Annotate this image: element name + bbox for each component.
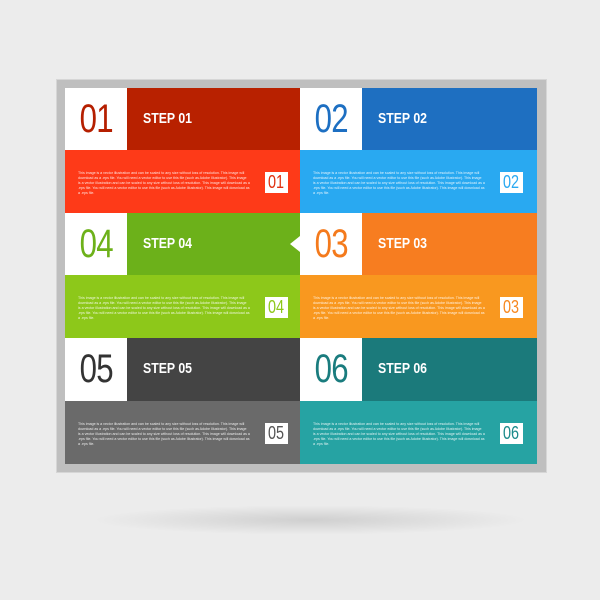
- text block 05: [65, 401, 300, 464]
- arrow: 02 to 03: [503, 212, 521, 222]
- number 03: 03: [314, 222, 348, 266]
- number 06: [300, 338, 362, 401]
- text block 05: This image is a vector illustration and can be scaled to any size without loss of resolution. This image will download as a .eps file. You will need a vector editor to use this file (such as Adobe Illustrator). This image is a vector illustration and can be scaled to any size without loss of resolution. This image will download as a .eps file. You will need a vector editor to use this file (such as Adobe Illustrator). This image will download as a .eps file.: [78, 422, 250, 446]
- heading step 02: [362, 88, 537, 150]
- panel: step 02: [300, 88, 537, 213]
- text block 06: This image is a vector illustration and can be scaled to any size without loss of resolution. This image will download as a .eps file. You will need a vector editor to use this file (such as Adobe Illustrator). This image is a vector illustration and can be scaled to any size without loss of resolution. This image will download as a .eps file. You will need a vector editor to use this file (such as Adobe Illustrator). This image will download as a .eps file.: [313, 422, 485, 446]
- heading step 02: STEP 02: [378, 110, 427, 127]
- text block 01: [65, 150, 300, 213]
- heading step 03: [362, 213, 537, 275]
- arrow: 04 to 05: [85, 337, 103, 347]
- number 02: 02: [314, 97, 348, 141]
- panel: step 04: [65, 213, 300, 338]
- text block 05: 05: [268, 423, 285, 443]
- number 04: 04: [79, 222, 113, 266]
- number 02: [300, 88, 362, 150]
- text block 06: [300, 401, 537, 464]
- heading step 01: STEP 01: [143, 110, 192, 127]
- text block 01: This image is a vector illustration and can be scaled to any size without loss of resolution. This image will download as a .eps file. You will need a vector editor to use this file (such as Adobe Illustrator). This image is a vector illustration and can be scaled to any size without loss of resolution. This image will download as a .eps file. You will need a vector editor to use this file (such as Adobe Illustrator). This image will download as a .eps file.: [78, 171, 250, 195]
- heading step 05: [127, 338, 300, 401]
- text block 03: [300, 275, 537, 338]
- text block 04: This image is a vector illustration and can be scaled to any size without loss of resolution. This image will download as a .eps file. You will need a vector editor to use this file (such as Adobe Illustrator). This image is a vector illustration and can be scaled to any size without loss of resolution. This image will download as a .eps file. You will need a vector editor to use this file (such as Adobe Illustrator). This image will download as a .eps file.: [78, 296, 250, 320]
- heading step 04: [127, 213, 300, 275]
- text block 01: 01: [268, 172, 285, 192]
- number 06: 06: [314, 347, 348, 391]
- frame: [57, 80, 546, 472]
- panel: step 05: [65, 338, 300, 464]
- text block 04: 04: [268, 297, 285, 317]
- text block 03: 03: [503, 297, 520, 317]
- heading step 03: STEP 03: [378, 235, 427, 252]
- text block 03: This image is a vector illustration and can be scaled to any size without loss of resolution. This image will download as a .eps file. You will need a vector editor to use this file (such as Adobe Illustrator). This image is a vector illustration and can be scaled to any size without loss of resolution. This image will download as a .eps file. You will need a vector editor to use this file (such as Adobe Illustrator). This image will download as a .eps file.: [313, 296, 485, 320]
- arrow: 03 to 04: [290, 236, 300, 252]
- number 05: [65, 338, 127, 401]
- text block 02: This image is a vector illustration and can be scaled to any size without loss of resolution. This image will download as a .eps file. You will need a vector editor to use this file (such as Adobe Illustrator). This image is a vector illustration and can be scaled to any size without loss of resolution. This image will download as a .eps file. You will need a vector editor to use this file (such as Adobe Illustrator). This image will download as a .eps file.: [313, 171, 485, 195]
- arrow: 05 to 06: [299, 362, 309, 378]
- panel: step 06: [300, 338, 537, 464]
- shadow: [90, 505, 530, 535]
- text block 02: 02: [503, 172, 520, 192]
- text block 06: 06: [503, 423, 520, 443]
- number 03: [300, 213, 362, 275]
- heading step 06: STEP 06: [378, 360, 427, 377]
- text block 02: [300, 150, 537, 213]
- text block 04: [65, 275, 300, 338]
- number 01: 01: [79, 97, 113, 141]
- arrow: 01 to 02: [299, 111, 309, 127]
- number 01: [65, 88, 127, 150]
- heading step 05: STEP 05: [143, 360, 192, 377]
- heading step 01: [127, 88, 300, 150]
- number 04: [65, 213, 127, 275]
- panel: step 01: [65, 88, 300, 213]
- number 05: 05: [79, 347, 113, 391]
- heading step 06: [362, 338, 537, 401]
- panel: step 03: [300, 213, 537, 338]
- heading step 04: STEP 04: [143, 235, 192, 252]
